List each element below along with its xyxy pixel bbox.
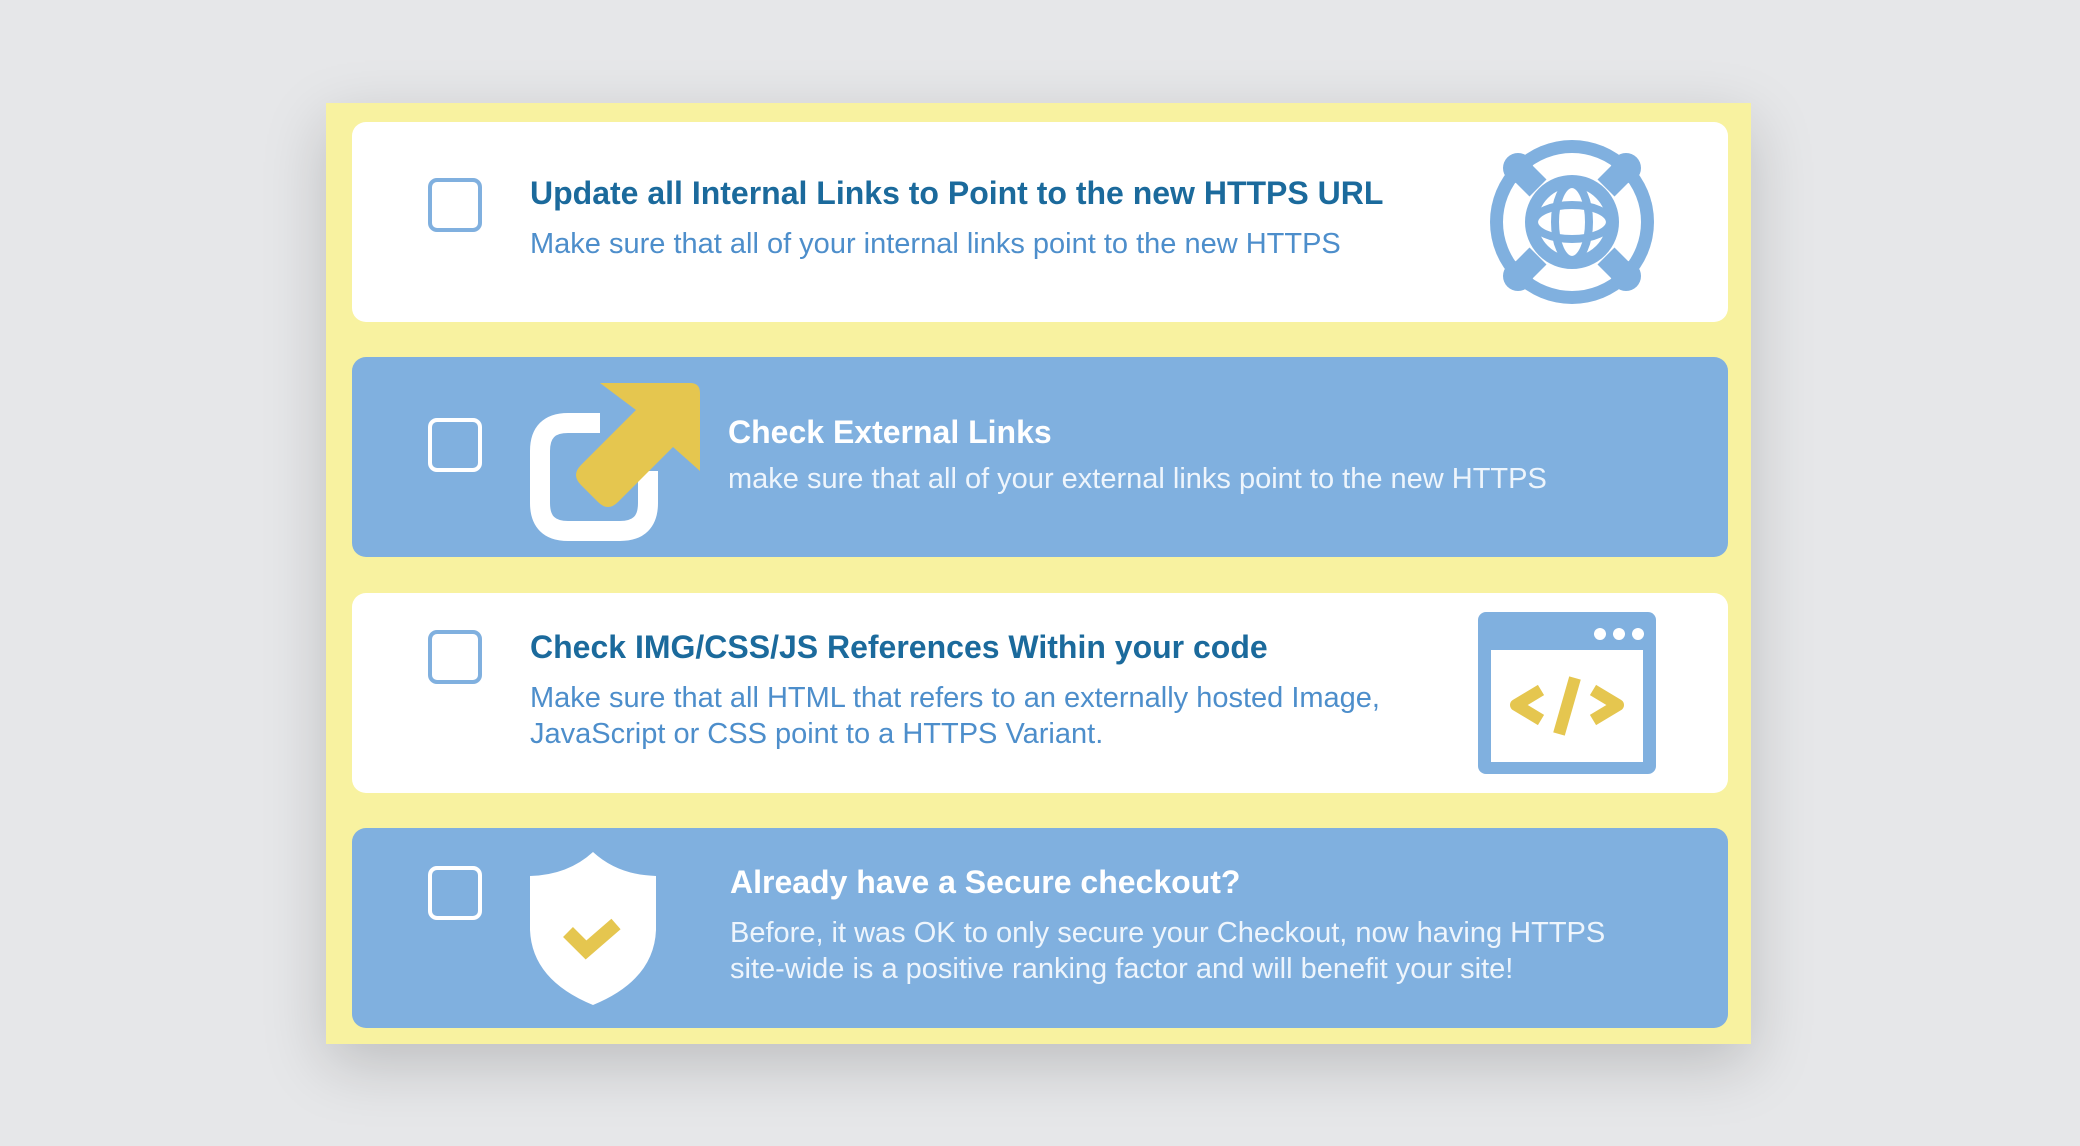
card 2: external links — [352, 357, 1728, 557]
text: card 2: Check External Links — [728, 414, 1052, 450]
text: card 1 — [530, 175, 1383, 260]
text: card 3 — [530, 629, 1380, 750]
card 1: internal links — [352, 122, 1728, 322]
checkbox 1 — [428, 178, 482, 232]
icon: code window — [1478, 612, 1656, 774]
checkbox 2 — [428, 418, 482, 472]
text: card 3: JavaScript or CSS point to a HTTPS Variant. — [530, 718, 1103, 750]
text: card 4: Already have a Secure checkout? — [730, 864, 1240, 900]
icon: external link — [530, 383, 700, 541]
checkbox 3 — [428, 630, 482, 684]
text: card 4: Before, it was OK to only secure your Checkout, now having HTTPS — [730, 917, 1605, 949]
card 3: references — [352, 593, 1728, 793]
text: card 3: Check IMG/CSS/JS References Within your code — [530, 629, 1268, 665]
text: card 1: Make sure that all of your internal links point to the new HTTPS — [530, 228, 1341, 260]
panel: yellow background — [326, 103, 1751, 1044]
icon: shield with check — [530, 852, 656, 1005]
text: card 3: Make sure that all HTML that refers to an externally hosted Image, — [530, 682, 1380, 714]
checkbox 4 — [428, 866, 482, 920]
text: card 2: make sure that all of your external links point to the new HTTPS — [728, 463, 1547, 495]
text: card 2 — [728, 414, 1547, 495]
text: card 4: site-wide is a positive ranking factor and will benefit your site! — [730, 953, 1513, 985]
text: card 4 — [730, 864, 1605, 985]
icon: lifebuoy globe — [1490, 140, 1654, 304]
text: card 1: Update all Internal Links to Point to the new HTTPS URL — [530, 175, 1383, 211]
card 4: secure checkout — [352, 828, 1728, 1028]
